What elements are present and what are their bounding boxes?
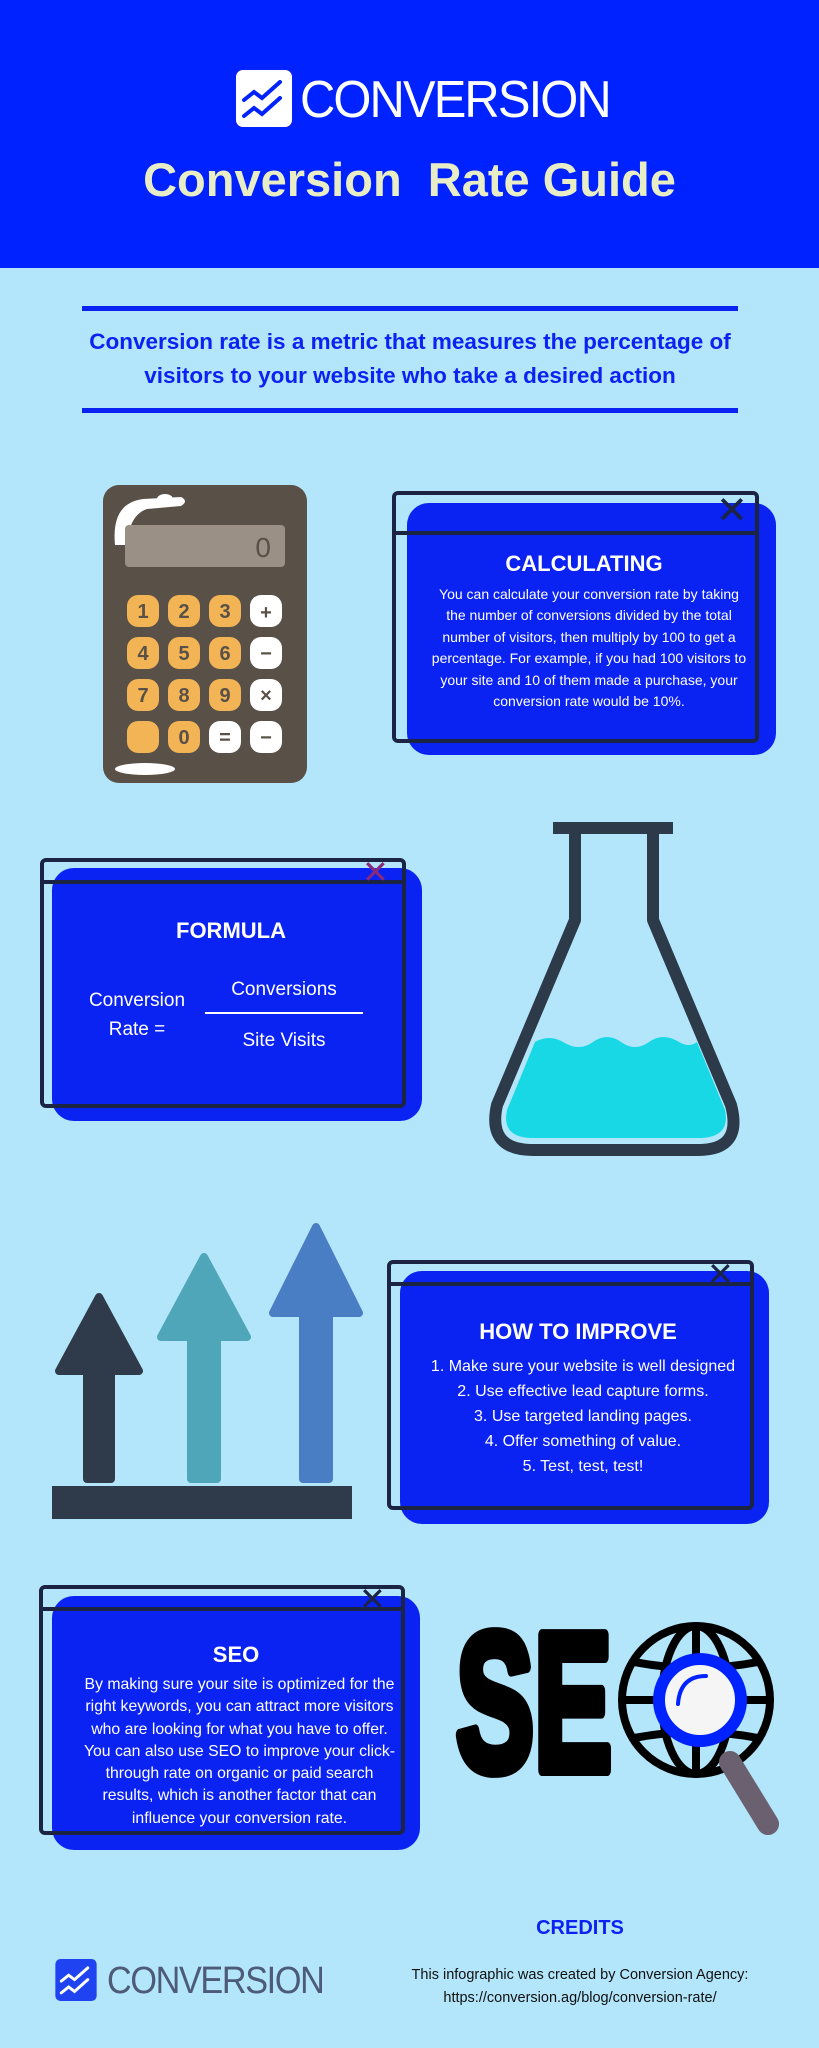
text: calculating: percentage. For example, if you had 100 visitors to: [432, 650, 746, 666]
text: seo: results, which is another factor that can: [103, 1787, 376, 1804]
icon: flask: [489, 822, 740, 1156]
formula: Site Visits: [242, 1030, 326, 1051]
heading: seo: SEO: [213, 1642, 259, 1667]
panel: calculating: [392, 490, 776, 755]
heading: how to improve: HOW TO IMPROVE: [479, 1319, 677, 1344]
icon: calculator: 4: [137, 643, 149, 665]
intro text block: Conversion rate is a metric that measures the percentage of visitors to your website who take a desired action: [89, 329, 731, 388]
heading: credits: CREDITS: [536, 1917, 624, 1939]
icon: logo chart: [236, 70, 292, 127]
footer logo: CONVERSION: [107, 1960, 323, 2002]
list: improvements: 3. Use targeted landing pages.: [474, 1408, 692, 1425]
text: credits: [412, 1967, 748, 2006]
logo: [236, 70, 610, 129]
formula: Conversion: [89, 990, 185, 1011]
icon: arrows up: [52, 1223, 363, 1519]
intro text block: [82, 306, 738, 413]
icon: calculator: 3: [219, 601, 231, 623]
text: seo: right keywords, you can attract more visitors: [85, 1698, 394, 1715]
text: calculating: number of visitors, then multiply by 100 to get a: [442, 629, 736, 645]
heading: calculating: CALCULATING: [505, 551, 663, 576]
text: credits: This infographic was created by Conversion Agency:: [412, 1967, 748, 1983]
list: improvements: [431, 1358, 735, 1475]
icon: close x: ✕: [707, 1256, 734, 1292]
panel: seo: [39, 1581, 420, 1850]
icon: calculator: 5: [178, 643, 190, 665]
icon: calculator: 0: [178, 727, 190, 749]
text: credits: https://conversion.ag/blog/conversion-rate/: [443, 1990, 717, 2006]
icon: calculator: −: [260, 643, 272, 665]
icon: calculator: 0: [255, 532, 271, 563]
formula: [89, 979, 363, 1051]
icon: close x: ✕: [716, 490, 748, 532]
icon: calculator: 8: [178, 685, 190, 707]
icon: calculator: 7: [137, 685, 149, 707]
formula: Rate =: [109, 1019, 165, 1040]
text: calculating: your site and 10 of them made a purchase, your: [440, 672, 738, 688]
panel: formula: [40, 854, 422, 1121]
icon: calculator: =: [219, 727, 231, 749]
icon: calculator: +: [260, 602, 272, 624]
list: improvements: 5. Test, test, test!: [523, 1458, 643, 1475]
icon: calculator: −: [260, 727, 272, 749]
title: Conversion Rate Guide: [143, 153, 676, 206]
icon: close x: ✕: [359, 1581, 386, 1617]
icon: calculator: 2: [178, 601, 190, 623]
list: improvements: 1. Make sure your website is well designed: [431, 1358, 735, 1375]
icon: close x: ✕: [362, 854, 389, 890]
text: seo: [84, 1676, 395, 1827]
text: seo: who are looking for what you have to offer.: [91, 1721, 388, 1738]
list: improvements: 4. Offer something of value.: [485, 1433, 681, 1450]
icon: calculator: [103, 485, 307, 783]
text: calculating: You can calculate your conversion rate by taking: [439, 586, 739, 602]
text: calculating: the number of conversions divided by the total: [446, 607, 732, 623]
logo text: CONVERSION: [300, 71, 610, 129]
list: improvements: 2. Use effective lead capture forms.: [457, 1383, 709, 1400]
text: seo: By making sure your site is optimized for the: [85, 1676, 394, 1693]
text: seo: through rate on organic or paid search: [106, 1765, 373, 1782]
text: seo: influence your conversion rate.: [132, 1810, 347, 1827]
text: calculating: [432, 586, 746, 709]
icon: calculator: 9: [219, 685, 231, 707]
panel: how to improve: [387, 1256, 769, 1524]
credits: [412, 1917, 748, 2006]
header band: [0, 0, 819, 268]
heading: formula: FORMULA: [176, 918, 286, 943]
text: seo: You can also use SEO to improve your click-: [84, 1743, 395, 1760]
formula: Conversions: [231, 979, 337, 1000]
icon: calculator: 1: [137, 601, 149, 623]
icon: calculator: 6: [219, 643, 231, 665]
icon: calculator: ×: [260, 685, 272, 707]
text: calculating: conversion rate would be 10%.: [493, 693, 685, 709]
